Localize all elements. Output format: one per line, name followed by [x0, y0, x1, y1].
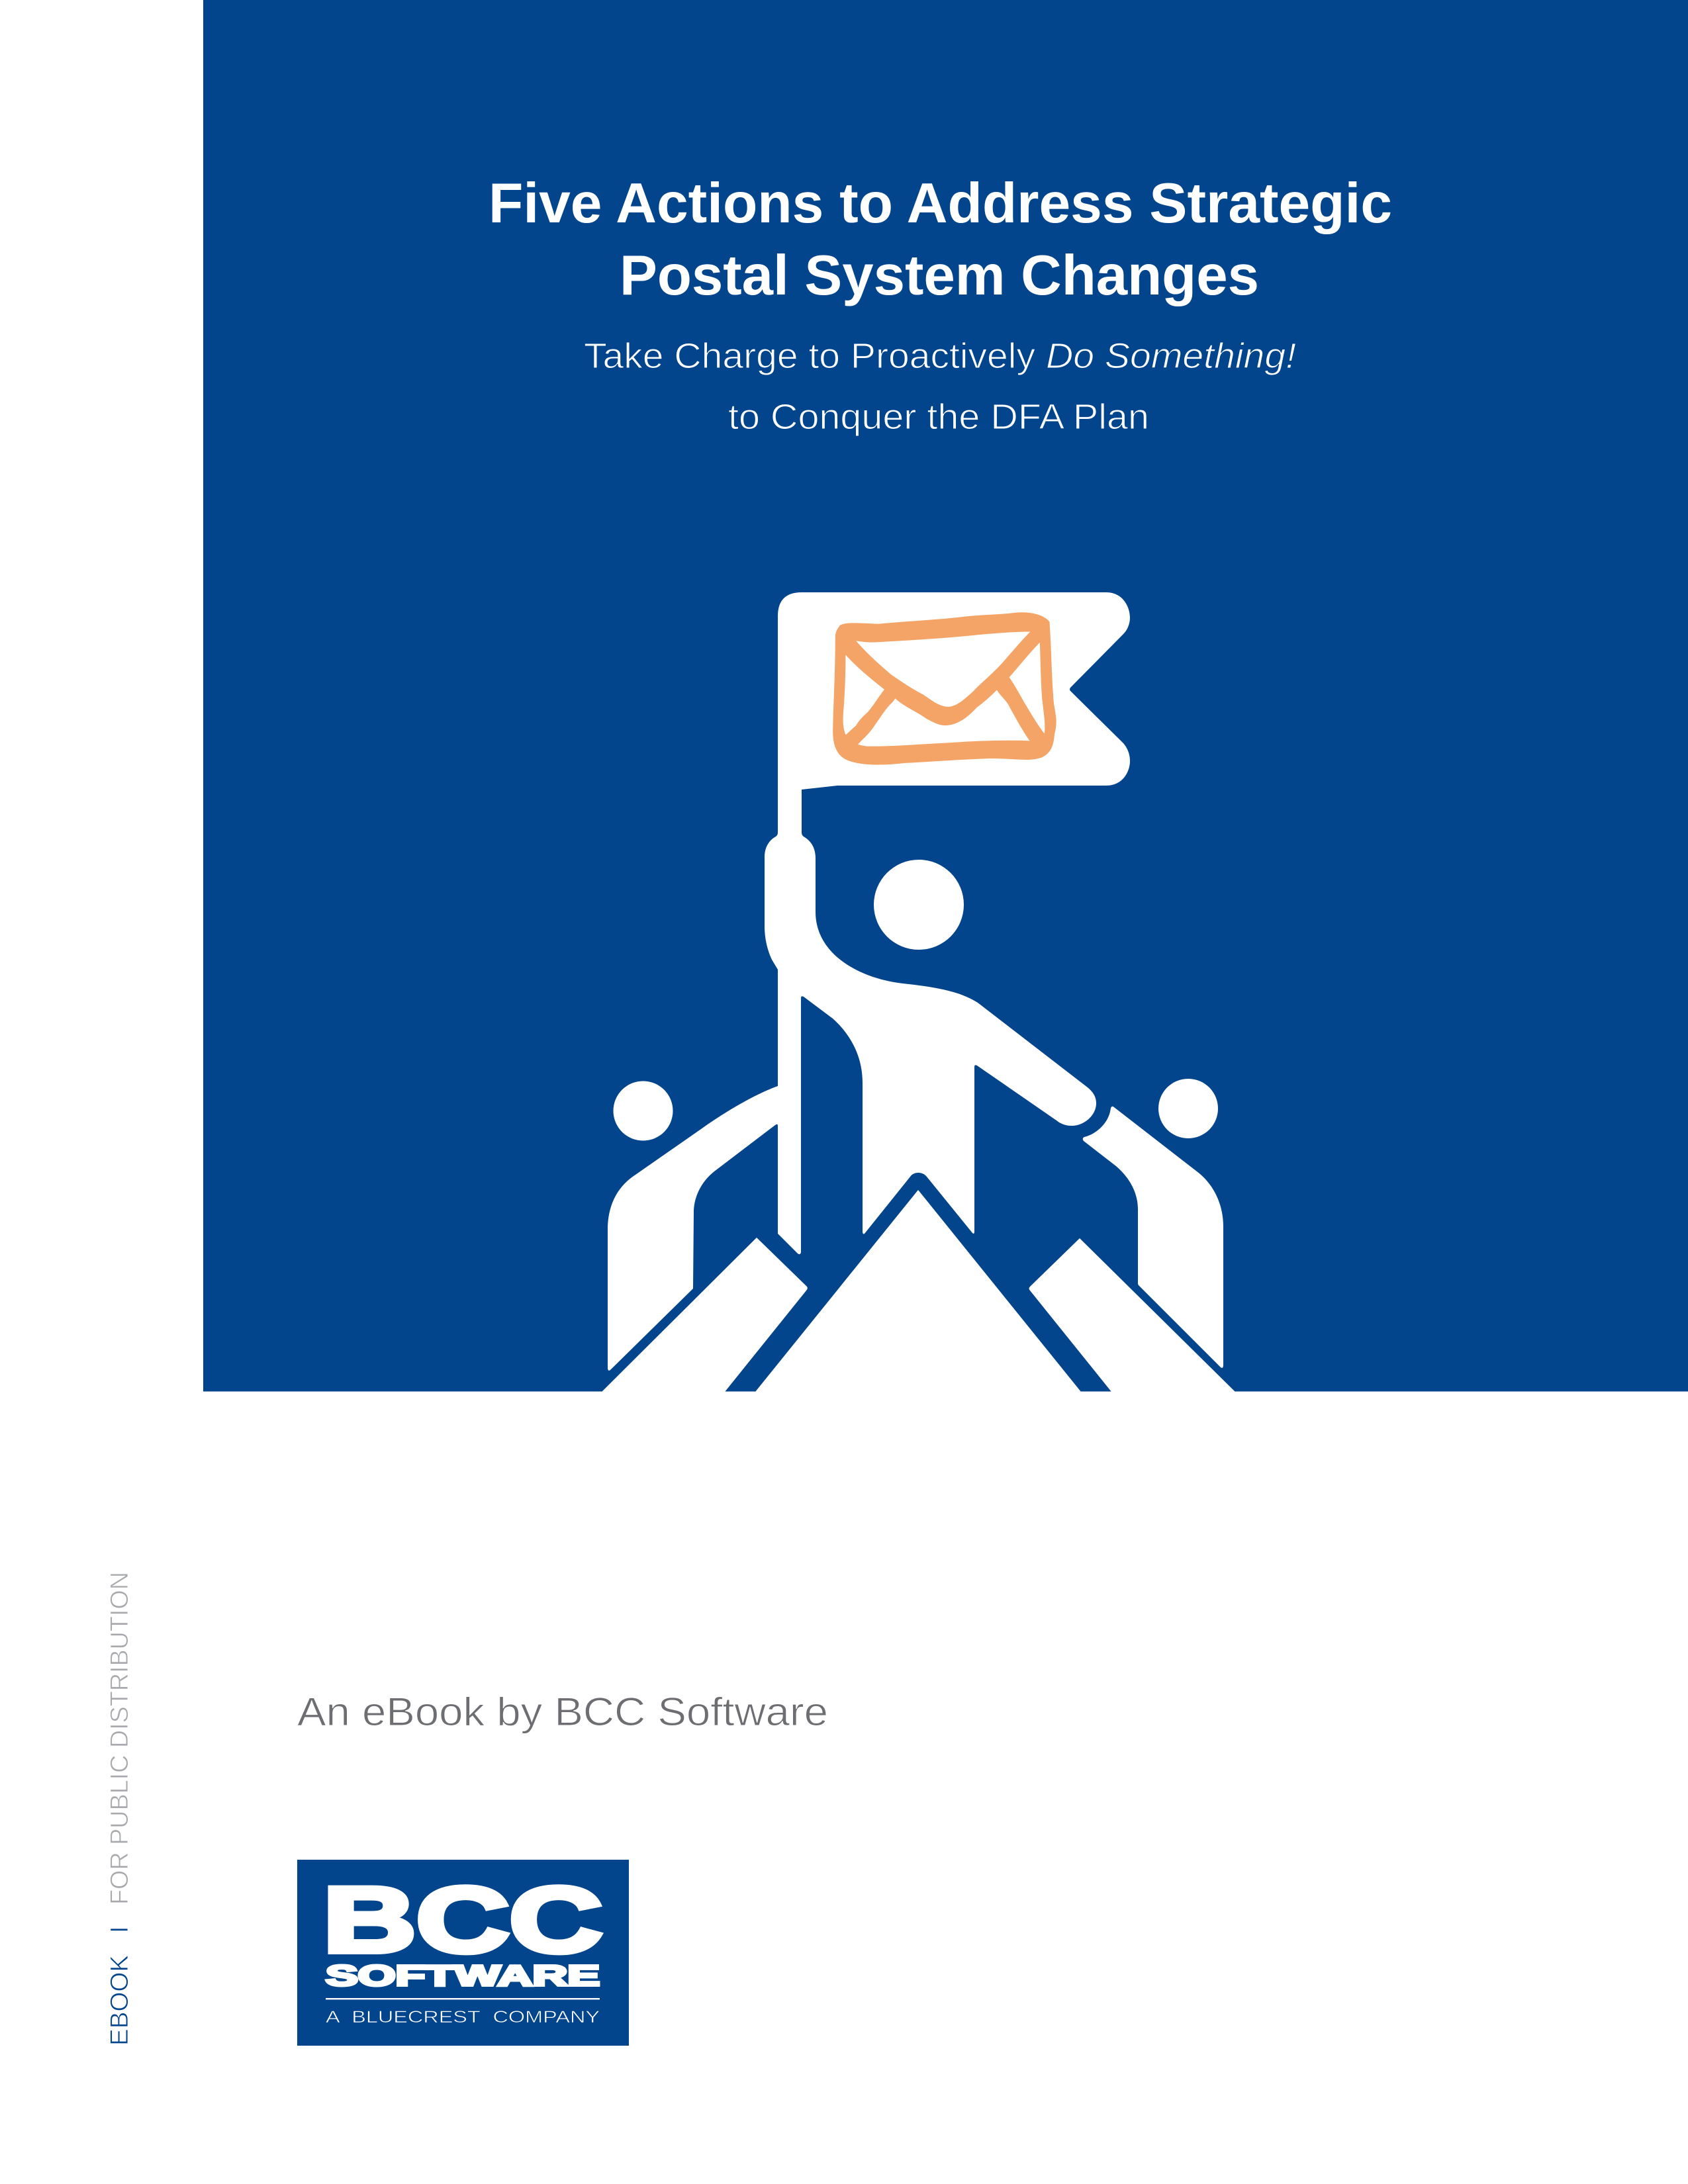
logo: BCC Software	[297, 1860, 629, 2046]
icon: flag with lead figure	[765, 592, 1130, 1254]
icon: mountain peaks	[602, 1190, 1235, 1392]
title	[489, 172, 1392, 307]
icon: lead figure head	[874, 860, 964, 950]
subtitle: Take Charge to Proactively	[584, 336, 1035, 376]
icon: right figure	[1083, 1079, 1223, 1368]
subtitle: to Conquer the DFA Plan	[728, 397, 1149, 437]
logo: BCC Software: SOFTWARE	[326, 1960, 600, 1992]
icon: orange envelope	[833, 613, 1056, 764]
title: Postal System Changes	[620, 244, 1259, 307]
title: Five Actions to Address Strategic	[489, 172, 1392, 235]
subtitle: Do Something!	[1046, 336, 1296, 376]
icon: left figure	[608, 1081, 778, 1371]
side label: FOR PUBLIC DISTRIBUTION	[106, 1572, 134, 1905]
logo: BCC Software: BCC	[323, 1868, 602, 1972]
byline: An eBook by BCC Software	[297, 1690, 828, 1734]
illustration: team raising a flag on a mountain	[602, 592, 1235, 1392]
side label: I	[106, 1926, 134, 1933]
side label	[106, 1572, 134, 2046]
subtitle	[584, 336, 1296, 437]
panel: blue cover background	[203, 0, 1688, 1391]
side label: EBOOK	[106, 1955, 134, 2046]
logo: BCC Software: A BLUECREST COMPANY	[326, 2008, 600, 2026]
